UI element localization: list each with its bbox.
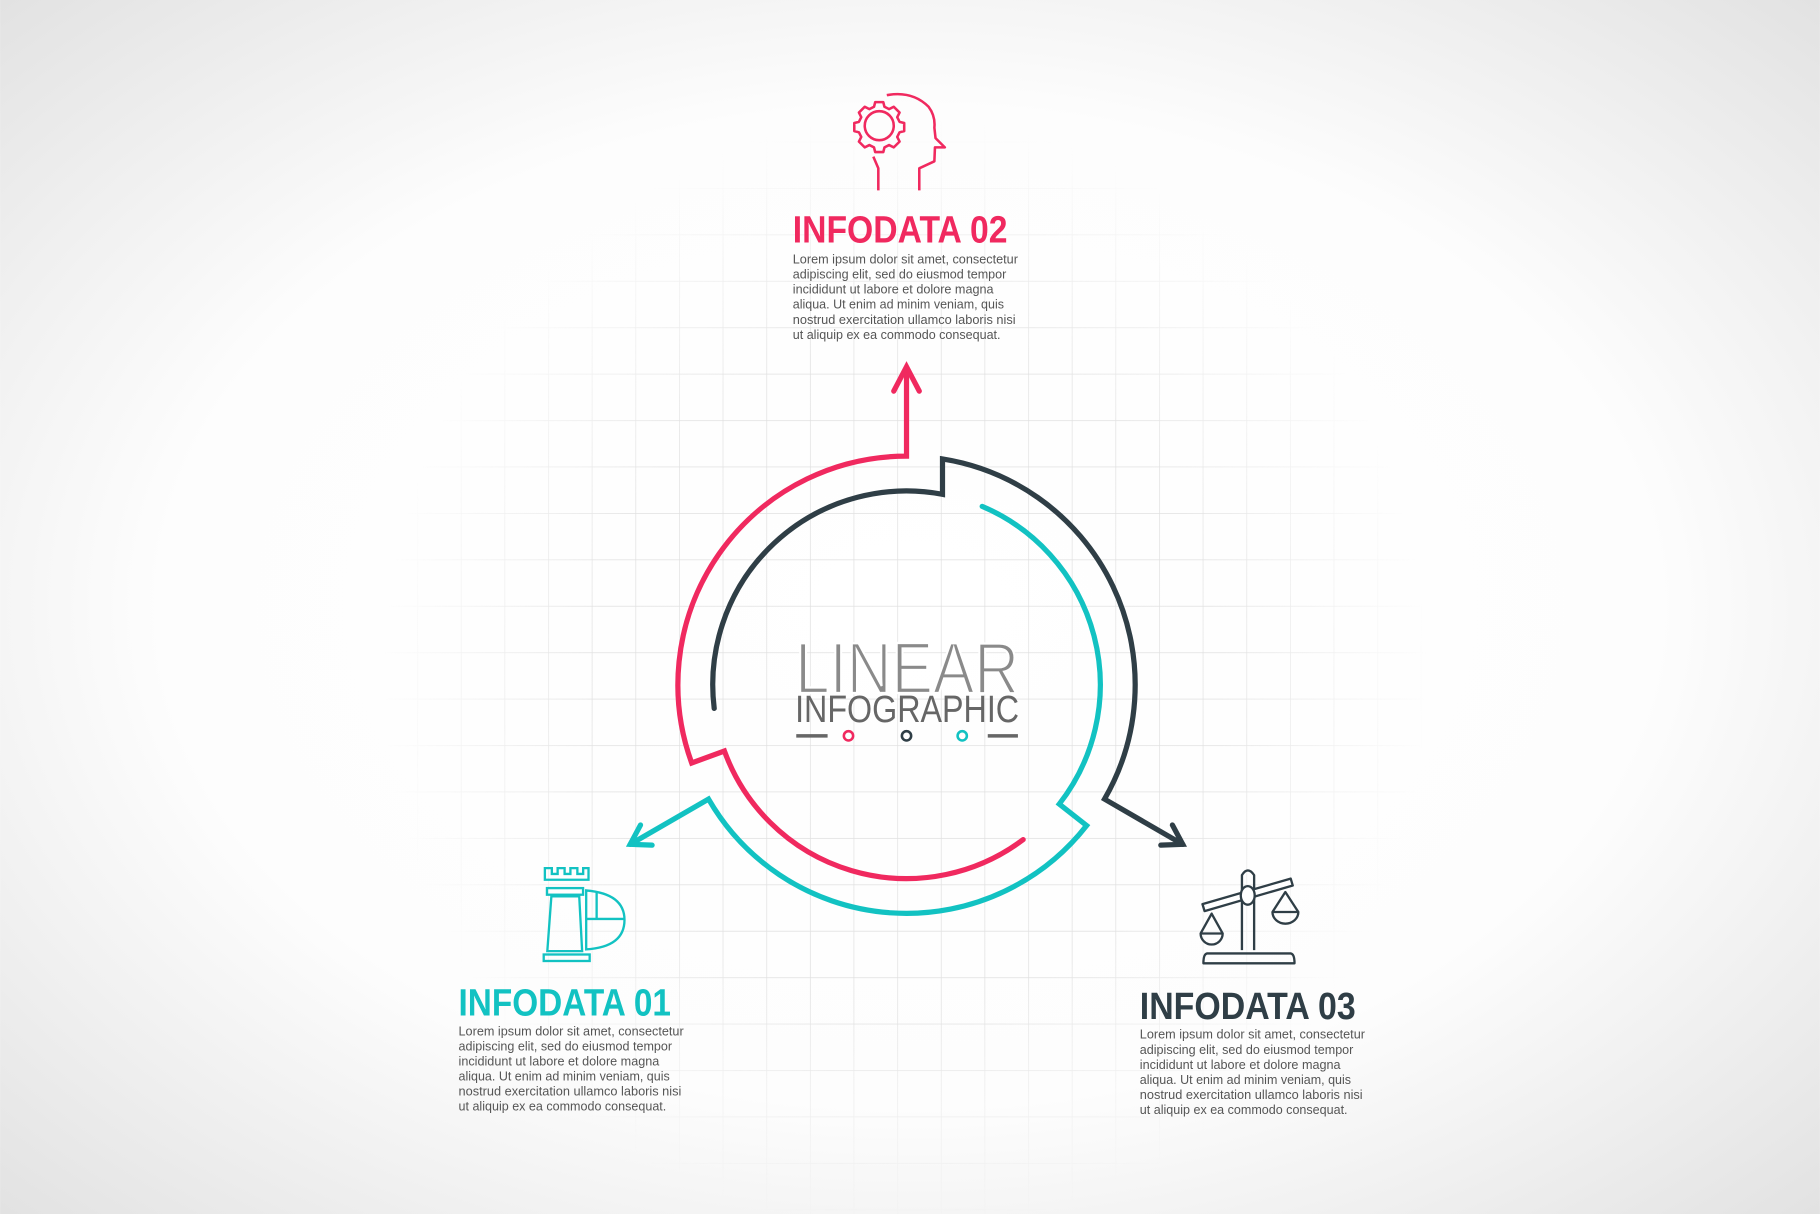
heading: INFODATA 03: INFODATA 03 bbox=[1140, 985, 1356, 1028]
arrow: pink cycle to INFODATA 02 bbox=[678, 367, 1023, 879]
icon: balance scales bbox=[1201, 870, 1298, 963]
center title bbox=[795, 629, 1019, 740]
text block: INFODATA 03 bbox=[1140, 1027, 1366, 1117]
text block: INFODATA 02: nostrud exercitation ullamco laboris nisi bbox=[793, 312, 1016, 327]
text block: INFODATA 03: incididunt ut labore et dolore magna bbox=[1140, 1057, 1341, 1072]
text block: INFODATA 03: Lorem ipsum dolor sit amet, consectetur bbox=[1140, 1027, 1366, 1042]
text block: INFODATA 01: adipiscing elit, sed do eiusmod tempor bbox=[459, 1038, 673, 1053]
text block: INFODATA 01: aliqua. Ut enim ad minim veniam, quis bbox=[459, 1069, 670, 1084]
text block: INFODATA 03: adipiscing elit, sed do eiusmod tempor bbox=[1140, 1042, 1354, 1057]
text block: INFODATA 02: aliqua. Ut enim ad minim veniam, quis bbox=[793, 297, 1004, 312]
text block: INFODATA 02 bbox=[793, 251, 1019, 342]
text block: INFODATA 03: nostrud exercitation ullamco laboris nisi bbox=[1140, 1087, 1363, 1102]
text block: INFODATA 02: adipiscing elit, sed do eiusmod tempor bbox=[793, 267, 1007, 282]
text block: INFODATA 03: ut aliquip ex ea commodo consequat. bbox=[1140, 1102, 1348, 1117]
arrow: teal cycle to INFODATA 01 bbox=[630, 506, 1100, 913]
text block: INFODATA 03: aliqua. Ut enim ad minim veniam, quis bbox=[1140, 1072, 1352, 1087]
text block: INFODATA 02: ut aliquip ex ea commodo consequat. bbox=[793, 327, 1001, 342]
text block: INFODATA 01: incididunt ut labore et dolore magna bbox=[459, 1053, 660, 1068]
heading: INFODATA 02: INFODATA 02 bbox=[793, 209, 1007, 252]
center title: LINEAR bbox=[795, 629, 1019, 709]
cycle diagram bbox=[630, 367, 1183, 913]
icon: head with gear bbox=[854, 94, 945, 190]
arrow: dark cycle to INFODATA 03 bbox=[713, 459, 1183, 845]
icon: chess rook with shield bbox=[544, 868, 624, 961]
text block: INFODATA 01: Lorem ipsum dolor sit amet, consectetur bbox=[459, 1023, 684, 1038]
heading: INFODATA 01: INFODATA 01 bbox=[459, 982, 671, 1025]
text block: INFODATA 01 bbox=[459, 1023, 684, 1114]
text block: INFODATA 02: incididunt ut labore et dolore magna bbox=[793, 282, 994, 297]
text block: INFODATA 02: Lorem ipsum dolor sit amet, consectetur bbox=[793, 251, 1019, 266]
text block: INFODATA 01: nostrud exercitation ullamco laboris nisi bbox=[459, 1084, 681, 1099]
center title: INFOGRAPHIC bbox=[795, 688, 1019, 731]
text block: INFODATA 01: ut aliquip ex ea commodo consequat. bbox=[459, 1099, 666, 1114]
